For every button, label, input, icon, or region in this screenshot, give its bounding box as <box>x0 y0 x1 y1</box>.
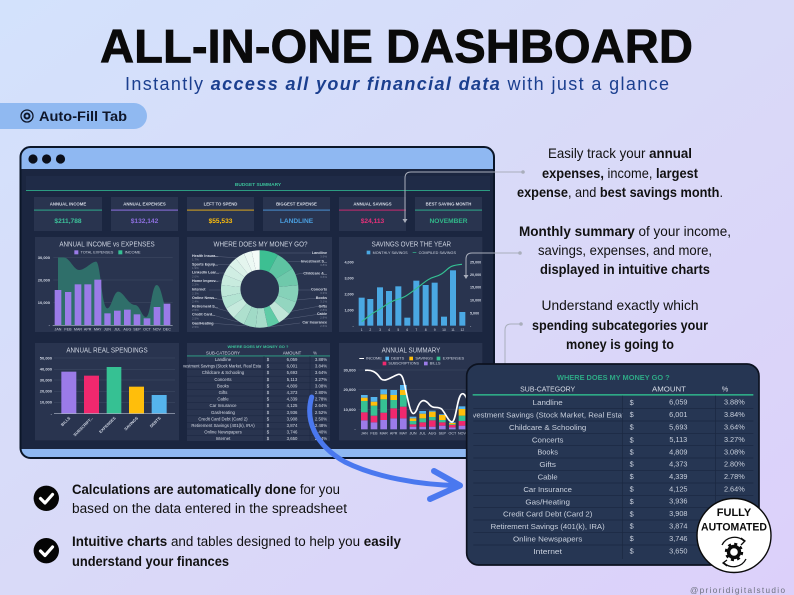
KPI cards: LANDLINE <box>280 218 314 225</box>
text block: monthly summary: displayed in intuitive charts <box>540 261 710 277</box>
chart: savings over the year: 9 <box>434 328 436 332</box>
chart: annual income vs expenses: ANNUAL INCOME vs EXPENSES <box>59 239 155 248</box>
chart: savings over the year <box>339 237 482 332</box>
panel: where does my money go popup table: Books <box>537 448 558 457</box>
panel: where does my money go popup table: Cable <box>538 473 558 482</box>
table: where does my money go small: 4,373 <box>287 390 298 395</box>
chart: savings over the year: - <box>352 324 354 328</box>
table: where does my money go small: $ <box>267 416 270 421</box>
chart: where does my money go donut: Car Insurance <box>302 321 327 325</box>
table: where does my money go small: 2.64% <box>315 403 327 408</box>
panel: where does my money go popup table: $ <box>630 472 634 481</box>
panel: where does my money go popup table: 3,874 <box>669 521 688 530</box>
table: where does my money go small: $ <box>267 357 270 362</box>
chart: where does my money go donut: Internet <box>192 288 206 292</box>
chart: savings over the year: 10,000 <box>470 299 481 303</box>
chart: savings over the year: 6 <box>406 328 408 332</box>
table: where does my money go small: 3.64% <box>315 370 327 375</box>
table: where does my money go small: 5,693 <box>287 370 298 375</box>
panel: where does my money go popup table: 4,339 <box>669 472 688 481</box>
table: where does my money go small: 3,746 <box>287 430 298 435</box>
chart: annual summary: SAVINGS <box>415 356 433 361</box>
chart: annual summary: - <box>354 427 356 432</box>
text block: annual expenses: expenses, income, largest <box>542 165 698 181</box>
arrow: blue curved arrow <box>310 397 460 499</box>
table: where does my money go small: Childcare & Schooling <box>202 370 245 375</box>
panel: where does my money go popup table: Investment Savings (Stock Market, Real Estate) <box>466 411 631 420</box>
chart: where does my money go donut: Sports Equip... <box>192 262 218 266</box>
chart: annual summary: BILLS <box>430 361 441 366</box>
panel: where does my money go popup table: Internet <box>533 547 562 556</box>
chart: annual income vs expenses: TOTAL EXPENSES <box>81 250 114 255</box>
chart: savings over the year: 8 <box>425 328 427 332</box>
panel: where does my money go popup table: Online Newspapers <box>513 535 583 544</box>
panel: where does my money go popup table: SUB-CATEGORY <box>520 384 575 393</box>
chart: where does my money go donut: Gifts <box>319 304 327 308</box>
panel: where does my money go popup table: $ <box>630 534 634 543</box>
panel: where does my money go popup table: 3.64% <box>724 422 745 431</box>
chart: where does my money go donut: Online News... <box>192 296 217 300</box>
chart: where does my money go donut: Cable <box>317 312 327 316</box>
text block: monthly summary: savings, expenses, and more, <box>538 242 712 258</box>
panel: where does my money go popup table: 4,125 <box>669 484 688 493</box>
chart: savings over the year: 3 <box>379 328 381 332</box>
chart: where does my money go donut: Books <box>316 296 327 300</box>
panel: where does my money go popup table: WHERE DOES MY MONEY GO ? <box>557 373 670 382</box>
chart: annual summary: APR <box>390 432 398 436</box>
chart: annual income vs expenses: NOV <box>153 327 162 331</box>
table: where does my money go small <box>183 343 330 441</box>
text block: intuitive charts: understand your finances <box>72 554 229 569</box>
panel: where does my money go popup table: $ <box>630 484 634 493</box>
chart: annual summary: 20,000 <box>343 387 356 392</box>
panel: where does my money go popup table: 5,693 <box>669 422 688 431</box>
chart: where does my money go donut: 3.1% <box>320 300 327 304</box>
chart: annual summary: MAY <box>400 432 408 436</box>
chart: annual real spendings: ANNUAL REAL SPENDINGS <box>66 347 148 354</box>
panel: where does my money go popup table: Concerts <box>532 435 564 444</box>
chart: annual income vs expenses: - <box>49 323 51 328</box>
KPI cards: $211,788 <box>54 218 82 225</box>
panel: where does my money go popup table: 3.84% <box>724 410 745 419</box>
KPI cards: $24,113 <box>361 218 385 225</box>
chart: savings over the year: COMPILED SAVINGS <box>419 250 456 255</box>
table: where does my money go small: 4,809 <box>287 383 298 388</box>
badge: fully automated <box>697 498 771 572</box>
chart: where does my money go donut: 2.5% <box>192 316 199 320</box>
chart: where does my money go donut: Concerts <box>311 287 327 291</box>
table: where does my money go small: 2.40% <box>315 430 327 435</box>
chart: savings over the year: 15,000 <box>470 286 481 290</box>
text block: calculations: based on the data entered in the spreadsheet <box>72 501 347 516</box>
chart: where does my money go donut: 2.8% <box>320 316 327 320</box>
panel: where does my money go popup table: $ <box>630 522 634 531</box>
panel: where does my money go popup table <box>466 364 759 565</box>
panel: where does my money go popup table: 3,746 <box>669 534 688 543</box>
chart: annual real spendings: 30,000 <box>40 377 53 382</box>
panel: where does my money go popup table: $ <box>630 423 634 432</box>
chart: where does my money go donut: Credit Card... <box>192 313 215 317</box>
chart: where does my money go donut: Home Improv... <box>192 279 218 283</box>
panel: where does my money go popup table: $ <box>630 460 634 469</box>
chart: annual real spendings: BILLS <box>60 415 72 427</box>
chart: annual summary <box>339 343 482 440</box>
budget summary header: BUDGET SUMMARY <box>235 182 282 188</box>
table: where does my money go small: vestment Savings (Stock Market, Real Esta <box>183 364 262 369</box>
chart: annual summary: DEBTS <box>391 356 405 361</box>
table: where does my money go small: 4,339 <box>287 397 298 402</box>
KPI cards: LEFT TO SPEND <box>204 202 237 206</box>
table: where does my money go small: Landline <box>215 357 232 362</box>
panel: dashboard window <box>20 147 494 458</box>
table: where does my money go small: Gas/Heating <box>211 410 236 415</box>
text block: subcategories: Understand exactly which <box>542 297 698 313</box>
chart: annual income vs expenses: JUL <box>114 327 121 331</box>
chart: where does my money go donut: Retirement S... <box>192 304 218 308</box>
panel: where does my money go popup table: $ <box>630 509 634 518</box>
table: where does my money go small: 6,059 <box>287 357 298 362</box>
panel: where does my money go popup table: Childcare & Schooling <box>509 423 586 432</box>
chart: annual income vs expenses: MAR <box>74 327 82 331</box>
text block: calculations: Calculations are automatically done for you <box>72 482 340 497</box>
table: where does my money go small: 2.34% <box>315 436 327 441</box>
chart: where does my money go donut: WHERE DOES MY MONEY GO? <box>214 240 308 248</box>
chart: annual income vs expenses: APR <box>84 327 92 331</box>
panel: where does my money go popup table: $ <box>630 398 634 407</box>
table: where does my money go small: 3,936 <box>287 410 298 415</box>
icon: gear with arrows <box>722 537 746 567</box>
table: where does my money go small: $ <box>267 390 270 395</box>
chart: annual summary: EXPENSES <box>443 356 464 361</box>
budget summary header <box>26 176 490 191</box>
chart: annual real spendings: 10,000 <box>40 400 53 405</box>
chart: where does my money go donut: Childcare &... <box>303 271 327 275</box>
KPI cards: ANNUAL INCOME <box>50 202 86 206</box>
chart: savings over the year: 2 <box>369 328 371 332</box>
table: where does my money go small: 3,874 <box>287 423 298 428</box>
panel: where does my money go popup table: 6,001 <box>669 410 688 419</box>
table: where does my money go small: $ <box>267 410 270 415</box>
chart: annual income vs expenses: SEP <box>133 327 141 331</box>
table: where does my money go small: $ <box>267 436 270 441</box>
chart: where does my money go donut: 1.7% <box>192 258 199 262</box>
chart: savings over the year: 25,000 <box>470 261 481 265</box>
chart: where does my money go donut: 3.8% <box>320 263 327 267</box>
table: where does my money go small: SUB-CATEGORY <box>206 350 240 356</box>
chart: where does my money go donut: Investment S... <box>301 259 327 263</box>
KPI cards: NOVEMBER <box>429 218 468 225</box>
table: where does my money go small: Cable <box>217 397 229 402</box>
badge: fully automated: AUTOMATED <box>701 522 767 534</box>
panel: where does my money go popup table: % <box>722 384 729 393</box>
table: where does my money go small: $ <box>267 423 270 428</box>
chart: annual summary: MAR <box>380 432 388 436</box>
panel: where does my money go popup table: 2.64% <box>724 484 745 493</box>
table: where does my money go small: 3.84% <box>315 364 327 369</box>
panel: where does my money go popup table: 3.88% <box>724 398 745 407</box>
table: where does my money go small: $ <box>267 377 270 382</box>
chart: where does my money go donut: 3.3% <box>320 291 327 295</box>
table: where does my money go small: $ <box>267 370 270 375</box>
text block: monthly summary: Monthly summary of your income, <box>519 223 731 239</box>
table: where does my money go small: % <box>313 350 317 356</box>
chart: savings over the year: 1 <box>361 328 363 332</box>
text block: annual expenses <box>517 145 723 200</box>
chart: savings over the year: 5,000 <box>470 311 479 315</box>
table: where does my money go small: 2.52% <box>315 410 327 415</box>
chart: annual real spendings: 40,000 <box>40 367 53 372</box>
chart: annual summary: AUG <box>428 432 436 436</box>
panel: where does my money go popup table: Retirement Savings (401(k), IRA) <box>491 522 605 531</box>
KPI cards: ANNUAL EXPENSES <box>123 202 166 206</box>
chart: where does my money go donut: Health Insura... <box>192 254 218 258</box>
text block: subcategories <box>532 297 708 352</box>
icon: tab gear <box>21 110 33 122</box>
panel: where does my money go popup table: 5,113 <box>669 435 687 444</box>
chart: where does my money go donut: 3.9% <box>320 255 327 259</box>
chart: annual income vs expenses: 20,000 <box>38 277 51 282</box>
table: where does my money go small: $ <box>267 383 270 388</box>
table: where does my money go small: 2.80% <box>315 390 327 395</box>
chart: savings over the year: 12 <box>460 328 464 332</box>
chart: savings over the year: 10 <box>442 328 446 332</box>
table: where does my money go small: $ <box>267 403 270 408</box>
chart: annual income vs expenses: 10,000 <box>38 300 51 305</box>
chart: savings over the year: - <box>470 324 472 328</box>
chart: where does my money go donut: LinkedIn Lear... <box>192 271 219 275</box>
panel: where does my money go popup table: Car Insurance <box>523 485 572 494</box>
KPI cards: BEST SAVING MONTH <box>426 202 471 206</box>
chart: where does my money go donut: 2.6% <box>320 324 327 328</box>
table: where does my money go small: Internet <box>216 436 231 441</box>
chart: where does my money go donut: 2.0% <box>192 274 199 278</box>
table: where does my money go small: 2.50% <box>315 416 327 421</box>
panel: where does my money go popup table: $ <box>630 497 634 506</box>
chart: annual summary: JUN <box>409 432 417 436</box>
chart: annual real spendings: 50,000 <box>40 355 53 360</box>
arrow: callout to table <box>502 322 523 381</box>
badge: fully automated: FULLY <box>717 507 752 519</box>
panel: where does my money go popup table: Gifts <box>539 460 556 469</box>
chart: annual summary: JUL <box>419 432 426 436</box>
panel: where does my money go popup table: 3,936 <box>669 497 688 506</box>
table: where does my money go small: Concerts <box>214 377 232 382</box>
chart: annual summary: NOV <box>458 432 467 436</box>
icon: check 2 <box>34 538 59 563</box>
KPI cards: $55,533 <box>209 218 233 225</box>
chart: where does my money go donut: 2.8% <box>320 308 327 312</box>
chart: savings over the year: 2,000 <box>345 292 354 296</box>
chart: annual income vs expenses: 30,000 <box>38 255 51 260</box>
panel: where does my money go popup table: $ <box>630 435 634 444</box>
icon: window dots <box>28 154 65 164</box>
chart: annual income vs expenses: MAY <box>94 327 102 331</box>
chart: savings over the year: SAVINGS OVER THE YEAR <box>372 239 451 248</box>
footer handle: @prioridigitalstudio <box>690 586 785 595</box>
table: where does my money go small: 6,001 <box>287 364 298 369</box>
panel: where does my money go popup table: 2.80% <box>724 460 745 469</box>
table: where does my money go small: WHERE DOES MY MONEY GO ? <box>228 344 289 349</box>
chart: annual real spendings: SUBSCRIPT... <box>72 416 94 437</box>
table: where does my money go small: Car Insurance <box>210 403 237 408</box>
text block: subcategories: spending subcategories your <box>532 317 708 333</box>
tab pill: Auto-Fill Tab: Auto-Fill Tab <box>39 108 127 124</box>
panel: where does my money go popup table: 4,809 <box>669 447 688 456</box>
tab pill: Auto-Fill Tab <box>0 103 147 129</box>
text block: subcategories: money is going to <box>566 336 674 352</box>
table: where does my money go small: Online Newspapers <box>204 430 242 435</box>
chart: annual real spendings: SAVINGS <box>123 415 139 432</box>
table: where does my money go small: 3.88% <box>315 357 327 362</box>
table: where does my money go small: 3,908 <box>287 416 298 421</box>
text block: calculations <box>72 482 347 516</box>
chart: savings over the year: 3,000 <box>345 276 354 280</box>
KPI cards: $132,142 <box>131 218 159 225</box>
chart: annual income vs expenses: FEB <box>64 327 72 331</box>
arrow: callout to savings chart <box>464 251 522 279</box>
panel: where does my money go popup table: 2.78% <box>724 472 745 481</box>
chart: annual real spendings: EXPENSES <box>98 415 117 434</box>
chart: annual real spendings: 20,000 <box>40 389 53 394</box>
chart: where does my money go donut: 2.5% <box>192 308 199 312</box>
panel: where does my money go popup table: 6,059 <box>669 398 688 407</box>
chart: savings over the year: 4 <box>388 328 390 332</box>
chart: annual income vs expenses: DEC <box>163 327 171 331</box>
arrow: callout to annual savings <box>402 170 525 223</box>
table: where does my money go small: $ <box>267 397 270 402</box>
chart: savings over the year: 20,000 <box>470 273 481 277</box>
table: where does my money go small: $ <box>267 364 270 369</box>
panel: where does my money go popup table: $ <box>630 447 634 456</box>
KPI cards: BIGGEST EXPENSE <box>276 202 317 206</box>
chart: savings over the year: 7 <box>415 328 417 332</box>
table: where does my money go small: Retirement Savings (401(k), IRA) <box>191 423 255 428</box>
chart: savings over the year: 1,000 <box>345 308 354 312</box>
title: ALL-IN-ONE DASHBOARD <box>100 20 693 72</box>
table: where does my money go small: 3.27% <box>315 377 327 382</box>
icon: check 1 <box>34 486 59 511</box>
panel: where does my money go popup table: AMOUNT <box>652 384 687 393</box>
chart: annual summary: INCOME <box>366 356 382 361</box>
table: where does my money go small: 3.08% <box>315 383 327 388</box>
chart: annual summary: ANNUAL SUMMARY <box>382 347 441 354</box>
chart: annual summary: SUBSCRIPTIONS <box>388 361 419 366</box>
chart: annual summary: OCT <box>448 432 457 436</box>
table: where does my money go small: Books <box>217 383 229 388</box>
chart: where does my money go donut: 2.4% <box>192 300 199 304</box>
chart: where does my money go donut: Landline <box>312 251 327 255</box>
panel: where does my money go popup table: 4,373 <box>669 460 688 469</box>
text block: annual expenses: expense, and best savings month. <box>517 184 723 200</box>
table: where does my money go small: $ <box>267 430 270 435</box>
chart: where does my money go donut: Gas/Heating <box>192 321 214 325</box>
text block: monthly summary <box>519 223 731 277</box>
KPI cards <box>34 197 482 231</box>
chart: annual income vs expenses: JUN <box>104 327 111 331</box>
text block: intuitive charts <box>72 534 401 569</box>
table: where does my money go small: 2.78% <box>315 397 327 402</box>
chart: annual summary: 10,000 <box>343 407 356 412</box>
panel: where does my money go popup table: Gas/Heating <box>525 497 570 506</box>
chart: annual income vs expenses <box>35 237 179 332</box>
panel: where does my money go popup table: 3,650 <box>669 546 688 555</box>
KPI cards: ANNUAL SAVINGS <box>353 202 392 206</box>
subtitle: Instantly access all your financial data with just a glance <box>125 74 669 94</box>
chart: savings over the year: MONTHLY SAVINGS <box>373 250 408 255</box>
table: where does my money go small: AMOUNT <box>283 350 302 356</box>
chart: annual summary: 30,000 <box>343 367 356 372</box>
text block: annual expenses: Easily track your annual <box>548 145 692 161</box>
chart: savings over the year: 11 <box>451 328 455 332</box>
stacked bars <box>361 385 465 429</box>
table: where does my money go small: Credit Card Debt (Card 2) <box>198 416 248 421</box>
chart: where does my money go donut: 2.2% <box>192 283 199 287</box>
panel: where does my money go popup table: $ <box>630 546 634 555</box>
chart: annual income vs expenses: INCOME <box>125 250 141 255</box>
table: where does my money go small: Gifts <box>219 390 227 395</box>
chart: where does my money go donut: 1.9% <box>192 266 199 270</box>
chart: where does my money go donut: 2.5% <box>192 325 199 329</box>
chart: annual real spendings: - <box>51 411 53 416</box>
chart: where does my money go donut: 2.3% <box>192 291 199 295</box>
chart: savings over the year: 5 <box>397 328 399 332</box>
table: where does my money go small: 2.48% <box>315 423 327 428</box>
chart: annual income vs expenses: AUG <box>123 327 131 331</box>
panel: where does my money go popup table: Credit Card Debt (Card 2) <box>503 510 592 519</box>
chart: annual income vs expenses: JAN <box>55 327 62 331</box>
chart: annual summary: JAN <box>361 432 368 436</box>
table: where does my money go small: 4,125 <box>287 403 298 408</box>
chart: annual income vs expenses: OCT <box>143 327 152 331</box>
panel: where does my money go popup table: $ <box>630 410 634 419</box>
panel: where does my money go popup table: 3,908 <box>669 509 688 518</box>
panel: where does my money go popup table: 3.08% <box>724 447 745 456</box>
chart: annual real spendings: DEBTS <box>149 415 162 429</box>
chart: annual summary: FEB <box>370 432 378 436</box>
panel: where does my money go popup table: 3.27% <box>724 435 745 444</box>
text block: intuitive charts: Intuitive charts and tables designed to help you easily <box>72 534 401 549</box>
table: where does my money go small: 3,650 <box>287 436 298 441</box>
panel: where does my money go popup table: Landline <box>533 398 563 407</box>
chart: annual summary: SEP <box>439 432 447 436</box>
chart: annual real spendings <box>35 343 179 440</box>
table: where does my money go small: 5,113 <box>287 377 298 382</box>
chart: savings over the year: 4,000 <box>345 261 354 265</box>
chart: where does my money go donut: 3.6% <box>320 275 327 279</box>
chart: where does my money go donut <box>187 237 332 332</box>
